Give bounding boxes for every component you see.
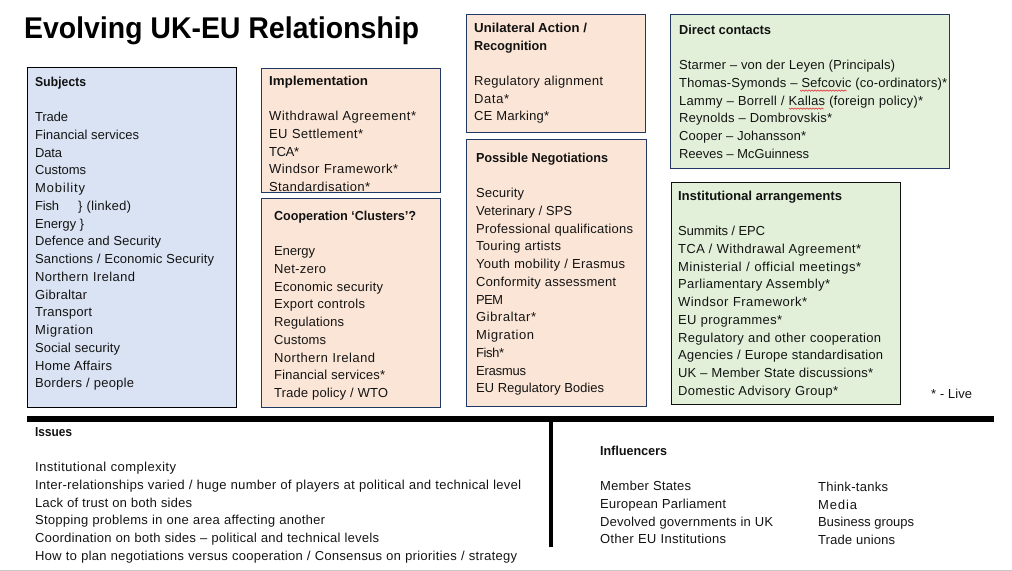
panel: possible negotiations: Fish*	[476, 345, 504, 360]
panel: institutional arrangements: Parliamentary Assembly*	[678, 276, 830, 291]
panel: possible negotiations: Erasmus	[476, 363, 526, 378]
panel: unilateral action: Regulatory alignment	[474, 73, 603, 88]
text block: influencers: Think-tanks	[818, 479, 888, 494]
vertical divider	[549, 422, 553, 547]
panel: subjects: Trade	[35, 109, 68, 124]
panel: possible negotiations: Professional qualifications	[476, 221, 634, 236]
panel: institutional arrangements: UK – Member State discussions*	[678, 365, 873, 380]
panel: subjects: Social security	[35, 340, 120, 355]
panel: cooperation clusters: Financial services*	[274, 367, 385, 382]
panel: possible negotiations: Youth mobility / Erasmus	[476, 256, 626, 271]
panel: subjects: Gibraltar	[35, 287, 88, 302]
panel: direct contacts: Cooper – Johansson*	[679, 128, 806, 143]
panel: implementation: EU Settlement*	[269, 126, 363, 141]
panel: subjects: Home Affairs	[35, 358, 112, 373]
text block: issues: Institutional complexity	[35, 459, 176, 474]
panel: subjects: Northern Ireland	[35, 269, 135, 284]
panel: direct contacts: Lammy – Borrell / Kallas (foreign policy)*	[679, 93, 923, 108]
panel: possible negotiations: EU Regulatory Bodies	[476, 380, 604, 395]
panel: subjects: Defence and Security	[35, 233, 162, 248]
text block: issues: Coordination on both sides – political and technical levels	[35, 530, 380, 545]
panel: subjects: Financial services	[35, 127, 140, 142]
panel: subjects: Subjects	[35, 74, 86, 89]
panel: direct contacts: Direct contacts	[679, 22, 771, 37]
text block: influencers: Media	[818, 497, 858, 512]
panel: possible negotiations: Conformity assessment	[476, 274, 616, 289]
text block: influencers: Business groups	[818, 514, 914, 529]
panel: institutional arrangements: Regulatory and other cooperation	[678, 330, 881, 345]
panel: subjects: Sanctions / Economic Security	[35, 251, 214, 266]
panel: implementation: Implementation	[269, 73, 368, 88]
panel: institutional arrangements: Ministerial / official meetings*	[678, 259, 861, 274]
panel: cooperation clusters: Energy	[274, 243, 316, 258]
panel: cooperation clusters: Trade policy / WTO	[274, 385, 388, 400]
panel: possible negotiations: Touring artists	[476, 238, 562, 253]
panel: subjects: Data	[35, 145, 63, 160]
panel: direct contacts: Thomas-Symonds – Sefcovic (co-ordinators)*	[679, 75, 947, 90]
text block: influencers: Devolved governments in UK	[600, 514, 773, 529]
horizontal divider	[27, 416, 994, 422]
panel: institutional arrangements: EU programmes*	[678, 312, 782, 327]
panel: possible negotiations	[466, 140, 646, 406]
panel: subjects: Migration	[35, 322, 93, 337]
panel: possible negotiations: Possible Negotiations	[476, 150, 608, 165]
panel: subjects: Transport	[35, 304, 92, 319]
panel: institutional arrangements: Domestic Advisory Group*	[678, 383, 838, 398]
panel: unilateral action: Data*	[474, 91, 509, 106]
panel: cooperation clusters: Customs	[274, 332, 326, 347]
panel: possible negotiations: Gibraltar*	[476, 309, 536, 324]
panel: implementation: Windsor Framework*	[269, 161, 398, 176]
legend: live marker: * - Live	[931, 386, 972, 401]
panel: possible negotiations: PEM	[476, 292, 503, 307]
panel: unilateral action: CE Marking*	[474, 108, 549, 123]
text block: influencers: Influencers	[600, 443, 667, 458]
panel: cooperation clusters: Northern Ireland	[274, 350, 375, 365]
panel: institutional arrangements: Summits / EPC	[678, 223, 765, 238]
panel: subjects	[28, 68, 236, 408]
panel: unilateral action	[466, 14, 646, 132]
panel: direct contacts: Reynolds – Dombrovskis*	[679, 110, 832, 125]
panel: cooperation clusters: Economic security	[274, 279, 384, 294]
panel: cooperation clusters: Net-zero	[274, 261, 326, 276]
panel: cooperation clusters	[262, 198, 440, 408]
panel: unilateral action: Unilateral Action /	[474, 20, 587, 35]
text block: influencers	[600, 443, 914, 547]
panel: cooperation clusters: Export controls	[274, 296, 366, 311]
panel: institutional arrangements: Agencies / Europe standardisation	[678, 347, 883, 362]
text block: issues: Lack of trust on both sides	[35, 495, 192, 510]
panel: direct contacts: Starmer – von der Leyen (Principals)	[679, 57, 895, 72]
text block: issues: Stopping problems in one area affecting another	[35, 512, 326, 527]
panel: possible negotiations: Migration	[476, 327, 534, 342]
panel: subjects: Borders / people	[35, 375, 134, 390]
text block: influencers: Member States	[600, 478, 692, 493]
panel: subjects: Mobility	[35, 180, 86, 195]
bottom edge line	[0, 570, 1012, 571]
panel: implementation	[262, 68, 440, 194]
panel: cooperation clusters: Cooperation ‘Clusters’?	[274, 208, 416, 223]
text block: influencers: Other EU Institutions	[600, 531, 726, 546]
panel: institutional arrangements	[672, 182, 900, 404]
panel: unilateral action: Recognition	[474, 38, 547, 53]
text block: issues: Issues	[35, 424, 72, 439]
panel: subjects: Customs	[35, 162, 86, 177]
panel: direct contacts: Reeves – McGuinness	[679, 146, 810, 161]
panel: direct contacts	[670, 14, 950, 168]
panel: possible negotiations: Security	[476, 185, 524, 200]
text block: issues	[35, 424, 521, 563]
panel: subjects: Energy }	[35, 216, 85, 231]
panel: institutional arrangements: Institutional arrangements	[678, 188, 842, 203]
text block: issues: How to plan negotiations versus cooperation / Consensus on priorities / strategy	[35, 548, 518, 563]
panel: possible negotiations: Veterinary / SPS	[476, 203, 572, 218]
panel: institutional arrangements: TCA / Withdrawal Agreement*	[678, 241, 861, 256]
text block: issues: Inter-relationships varied / huge number of players at political and technical level	[35, 477, 521, 492]
text block: influencers: European Parliament	[600, 496, 726, 511]
panel: institutional arrangements: Windsor Framework*	[678, 294, 807, 309]
panel: subjects: Fish	[35, 198, 59, 213]
title: Evolving UK-EU Relationship	[24, 12, 419, 45]
panel: subjects: } (linked)	[78, 198, 131, 213]
panel: cooperation clusters: Regulations	[274, 314, 344, 329]
panel: implementation: Standardisation*	[269, 179, 370, 194]
text block: influencers: Trade unions	[818, 532, 896, 547]
panel: implementation: TCA*	[269, 144, 299, 159]
panel: implementation: Withdrawal Agreement*	[269, 108, 416, 123]
